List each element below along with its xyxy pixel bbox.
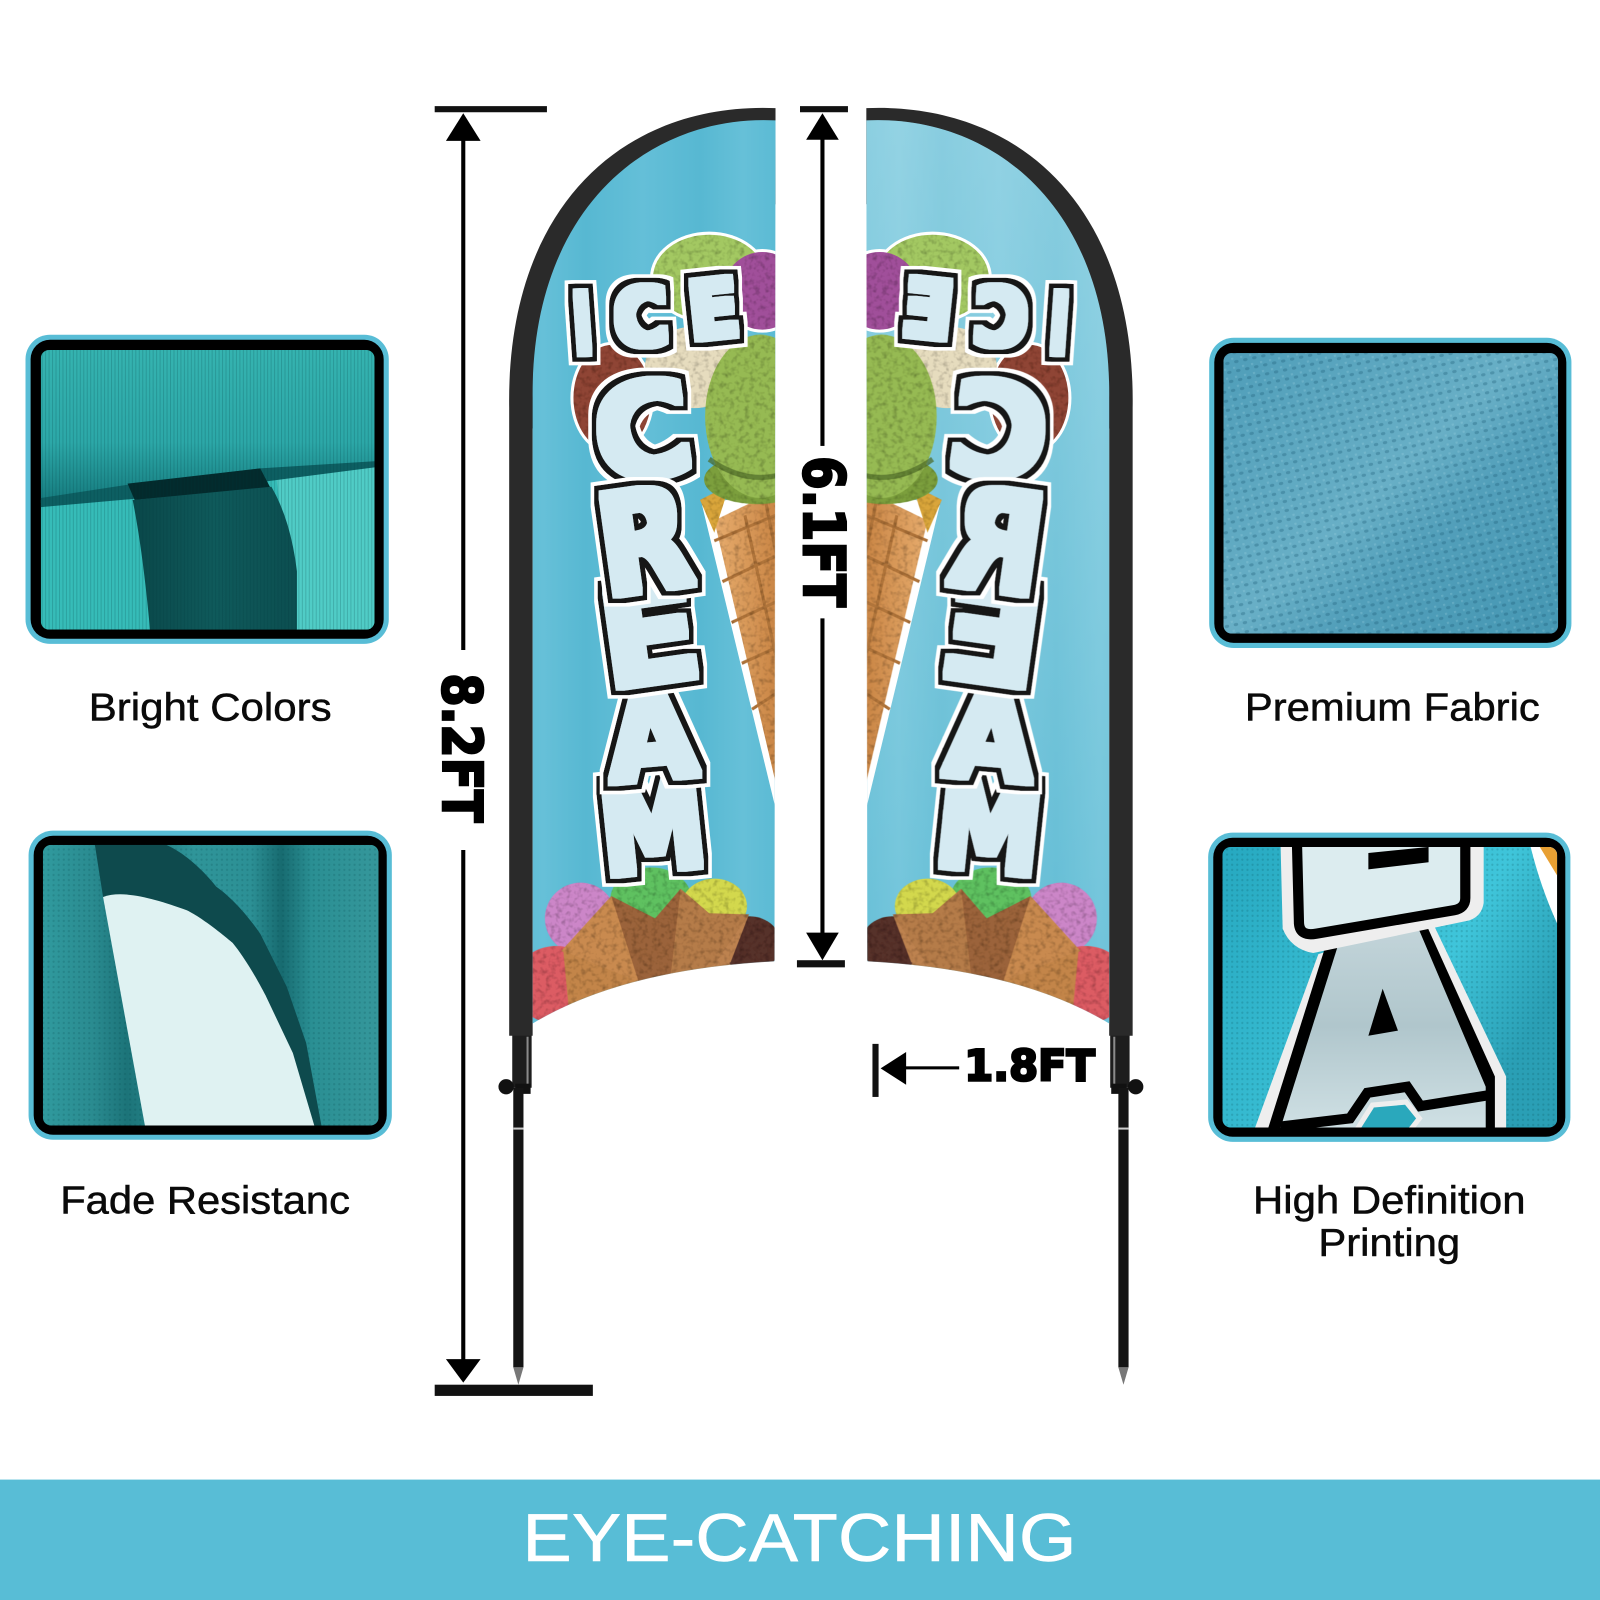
lettering: ICE CREAM: I <box>572 275 594 374</box>
lettering: ICE CREAM: E <box>684 262 743 358</box>
lettering: ICE CREAM: M <box>593 751 713 906</box>
width dimension arrow 1.8FT <box>872 1042 1095 1097</box>
flag height dimension arrow 6.1FT: 6.1FT <box>790 456 856 607</box>
panel: Premium Fabric <box>1209 338 1571 648</box>
right pole <box>1110 1035 1143 1385</box>
panel: High Definition Printing <box>1208 833 1570 1142</box>
mirrored lettering: ICE CREAM <box>899 262 1070 906</box>
mirrored lettering: ICE CREAM: M <box>929 751 1049 906</box>
mirrored lettering: ICE CREAM: C <box>971 270 1031 365</box>
height dimension arrow 8.2FT <box>430 106 593 1396</box>
mirrored lettering: ICE CREAM: E <box>931 552 1053 721</box>
banner: EYE-CATCHING: EYE-CATCHING <box>522 1501 1077 1576</box>
width dimension arrow 1.8FT: 1.8FT <box>964 1042 1095 1092</box>
mirrored lettering: ICE CREAM: C <box>940 351 1058 512</box>
panel: Fade Resistance <box>29 831 392 1140</box>
label: High Definition Printing <box>1253 1179 1526 1265</box>
right flag with pole <box>827 102 1143 1385</box>
label: High Definition Printing: High Definition <box>1253 1179 1526 1222</box>
height dimension arrow 8.2FT: 8.2FT <box>430 673 493 823</box>
mirrored lettering: ICE CREAM: A <box>940 663 1041 811</box>
mirrored lettering: ICE CREAM: R <box>941 457 1054 629</box>
lettering: ICE CREAM: R <box>588 457 701 629</box>
lettering: ICE CREAM: A <box>601 663 702 811</box>
panel: Bright Colors <box>26 335 389 644</box>
label: Bright Colors: Bright Colors <box>89 686 332 729</box>
left flag with pole <box>498 102 815 1385</box>
flag height dimension arrow 6.1FT <box>790 106 856 967</box>
banner: EYE-CATCHING <box>0 1480 1600 1600</box>
lettering: ICE CREAM: C <box>611 270 671 365</box>
label: Premium Fabric: Premium Fabric <box>1245 686 1540 729</box>
right flag fabric and lettering <box>827 102 1142 1041</box>
left pole <box>498 1035 532 1385</box>
label: High Definition Printing: Printing <box>1318 1222 1460 1265</box>
left flag border <box>509 108 776 1036</box>
lettering: ICE CREAM <box>572 262 743 906</box>
mirrored lettering: ICE CREAM: I <box>1048 275 1070 374</box>
mirrored lettering: ICE CREAM: E <box>899 262 958 358</box>
label: Fade Resistanc: Fade Resistanc <box>60 1179 350 1222</box>
right flag border <box>866 108 1133 1036</box>
left flag fabric and lettering <box>500 102 815 1041</box>
lettering: ICE CREAM: C <box>584 351 701 512</box>
lettering: ICE CREAM: E <box>589 552 710 721</box>
